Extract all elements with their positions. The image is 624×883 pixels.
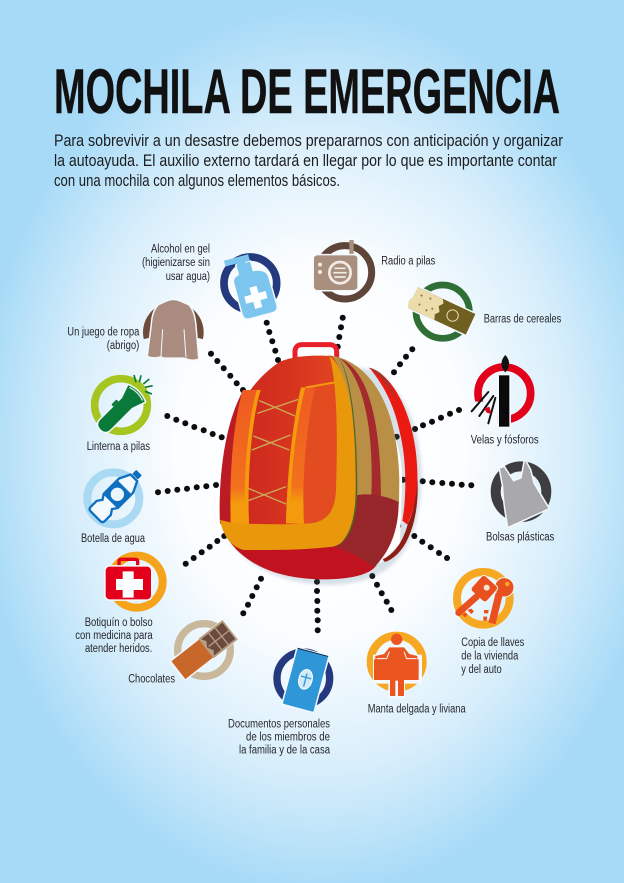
shoulder strap — [368, 368, 418, 562]
icon: blanket — [371, 634, 423, 698]
label: documentos: la familia y de la casa — [239, 745, 330, 757]
icon: hand sanitizer — [224, 251, 278, 321]
label: llaves — [461, 637, 524, 676]
icon: documents — [277, 648, 330, 712]
icon: radio — [314, 240, 372, 299]
side tan — [328, 355, 399, 503]
label: botiquin: atender heridos. — [85, 643, 152, 655]
label: documentos: Documentos personales — [228, 718, 330, 730]
main front — [220, 356, 353, 547]
label: llaves: y del auto — [461, 664, 502, 676]
icon: water bottle — [87, 465, 147, 524]
label: alcohol: usar agua) — [166, 271, 210, 283]
intro text — [54, 132, 563, 190]
straps front — [230, 390, 260, 525]
label: barras: Barras de cereales — [484, 313, 561, 325]
label: alcohol: Alcohol en gel — [151, 244, 210, 256]
label: bolsas: Bolsas plásticas — [486, 532, 554, 544]
label: documentos: de los miembros de — [246, 731, 330, 743]
intro text: con una mochila con algunos elementos básicos. — [54, 172, 340, 190]
icon: plastic bag — [496, 461, 548, 527]
label: botiquin: con medicina para — [75, 630, 153, 642]
icon: keys — [457, 572, 514, 625]
label: alcohol — [142, 244, 210, 283]
label: documentos — [228, 718, 330, 757]
yellow band — [220, 356, 356, 550]
label: linterna: Linterna a pilas — [87, 441, 150, 453]
handle — [295, 345, 337, 358]
intro text: la autoayuda. El auxilio externo tardará en llegar por lo que es importante contar — [54, 152, 557, 170]
label: ropa: Un juego de ropa — [67, 327, 140, 339]
laces — [248, 399, 298, 504]
label: manta: Manta delgada y liviana — [368, 704, 466, 716]
label: botiquin: Botiquín o bolso — [85, 617, 153, 629]
label: botella: Botella de agua — [81, 533, 145, 545]
label: botiquin — [75, 617, 153, 655]
label: radio: Radio a pilas — [381, 256, 436, 268]
dotted connectors — [155, 315, 474, 633]
icon: first aid kit — [106, 556, 163, 608]
pocket — [332, 494, 399, 567]
backpack — [220, 345, 422, 585]
icon: jacket — [147, 300, 200, 360]
icon: cereal bar — [406, 285, 475, 338]
bottom — [220, 520, 377, 579]
label: llaves: Copia de llaves — [461, 637, 524, 649]
icon: chocolate bar — [171, 620, 238, 680]
icon: flashlight — [92, 375, 153, 438]
label: ropa — [67, 327, 140, 352]
label: chocolates: Chocolates — [128, 673, 175, 685]
label: velas: Velas y fósforos — [471, 434, 539, 446]
label: ropa: (abrigo) — [107, 340, 139, 352]
label: llaves: de la vivienda — [461, 651, 519, 663]
label: alcohol: (higienizarse sin — [142, 257, 210, 269]
icon: candle and matches — [468, 355, 531, 428]
